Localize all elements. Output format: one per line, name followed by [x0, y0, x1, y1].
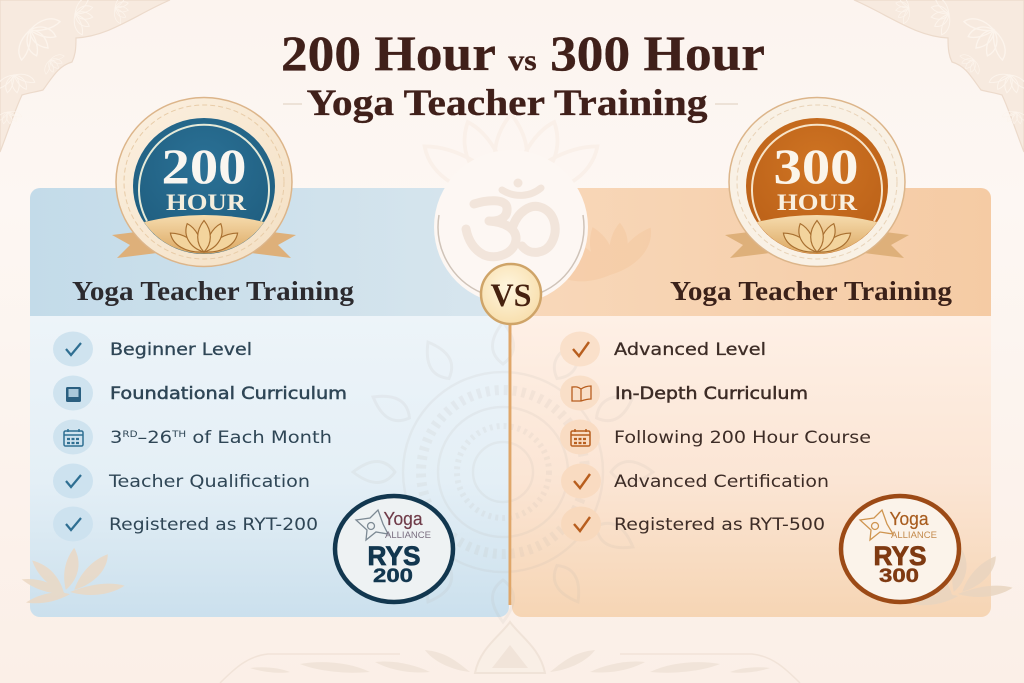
heading: 300 hour panel: Yoga Teacher Training	[670, 276, 953, 306]
item: following 200 hour course	[560, 420, 871, 454]
badge number: 200: 200	[162, 138, 246, 194]
item: advanced level	[560, 332, 766, 366]
list: 300 hour features	[560, 332, 871, 542]
badge label: hour: HOUR	[777, 190, 857, 215]
icon: VS medallion	[481, 264, 541, 324]
badge: Yoga Alliance RYS 300	[841, 496, 959, 602]
item: dates: –26	[138, 428, 172, 448]
title	[281, 25, 765, 124]
badge: Yoga Alliance RYS 200: 200	[373, 566, 413, 587]
icon: yoga alliance flower	[860, 510, 893, 540]
badge: Yoga Alliance RYS 200	[335, 496, 453, 602]
item: in-depth curriculum	[560, 376, 808, 410]
item: registered as RYT-200: Registered as RYT-200	[109, 515, 318, 535]
panel: 300 hour	[512, 188, 1013, 617]
title: 200 Hour vs 300 Hour	[281, 25, 765, 81]
decoration: left leaves	[22, 548, 125, 603]
badge: Yoga Alliance RYS 200: ALLIANCE	[385, 530, 431, 541]
panel body: 200 hour	[30, 316, 509, 617]
icon: VS medallion: VS	[490, 278, 532, 314]
decoration: right leaves	[910, 550, 1013, 605]
badge: Yoga Alliance RYS 200: RYS	[368, 541, 420, 571]
item: dates: RD	[122, 430, 138, 440]
badge: 300 hour medal	[725, 98, 909, 266]
decoration: centre mandala	[353, 322, 653, 622]
item: following 200 hour course: Following 200 Hour Course	[614, 428, 871, 448]
item: foundational curriculum: Foundational Curriculum	[110, 384, 347, 404]
panel header: 300 hour	[512, 188, 991, 316]
decoration: top-left corner floral	[0, 0, 170, 152]
item: dates: TH	[171, 430, 186, 440]
panel: 200 hour	[22, 188, 510, 617]
icon: om symbol in centre circle	[434, 150, 588, 304]
item: dates: of Each Month	[186, 428, 332, 448]
item: teacher qualification: Teacher Qualification	[108, 472, 310, 492]
item: beginner level: Beginner Level	[110, 340, 252, 360]
icon: yoga alliance flower	[356, 510, 388, 540]
decoration: lotus behind om	[425, 114, 597, 195]
item: advanced certification: Advanced Certification	[614, 472, 829, 492]
item: foundational curriculum	[53, 376, 347, 410]
item: advanced certification	[561, 464, 829, 498]
decoration: bottom centre ornament	[220, 622, 800, 683]
item: dates: 3	[110, 428, 121, 448]
item: teacher qualification	[53, 464, 310, 498]
item: advanced level: Advanced Level	[614, 340, 766, 360]
panel header: 200 hour	[30, 188, 510, 316]
item: registered as RYT-500: Registered as RYT-500	[614, 515, 825, 535]
item: beginner level	[53, 332, 252, 366]
badge: 200 hour medal	[112, 98, 296, 266]
heading: 200 hour panel: Yoga Teacher Training	[72, 276, 355, 306]
item: registered as RYT-200	[53, 506, 318, 542]
item: dates	[53, 420, 332, 454]
badge number: 300: 300	[774, 138, 858, 194]
centre divider	[508, 316, 512, 605]
badge label: hour: HOUR	[166, 190, 246, 215]
badge: Yoga Alliance RYS 300: RYS	[874, 541, 926, 571]
panel body: 300 hour	[512, 316, 991, 617]
badge: Yoga Alliance RYS 300: ALLIANCE	[891, 530, 937, 541]
decoration: header paisley	[541, 208, 661, 294]
title: Yoga Teacher Training	[306, 83, 708, 124]
item: in-depth curriculum: In-Depth Curriculum	[615, 384, 808, 404]
decoration: top-right corner floral	[854, 0, 1024, 152]
badge: Yoga Alliance RYS 300: Yoga	[890, 509, 929, 529]
item: registered as RYT-500	[561, 506, 825, 542]
list: 200 hour features	[53, 332, 347, 542]
badge: Yoga Alliance RYS 200: Yoga	[384, 509, 423, 529]
badge: Yoga Alliance RYS 300: 300	[879, 566, 919, 587]
